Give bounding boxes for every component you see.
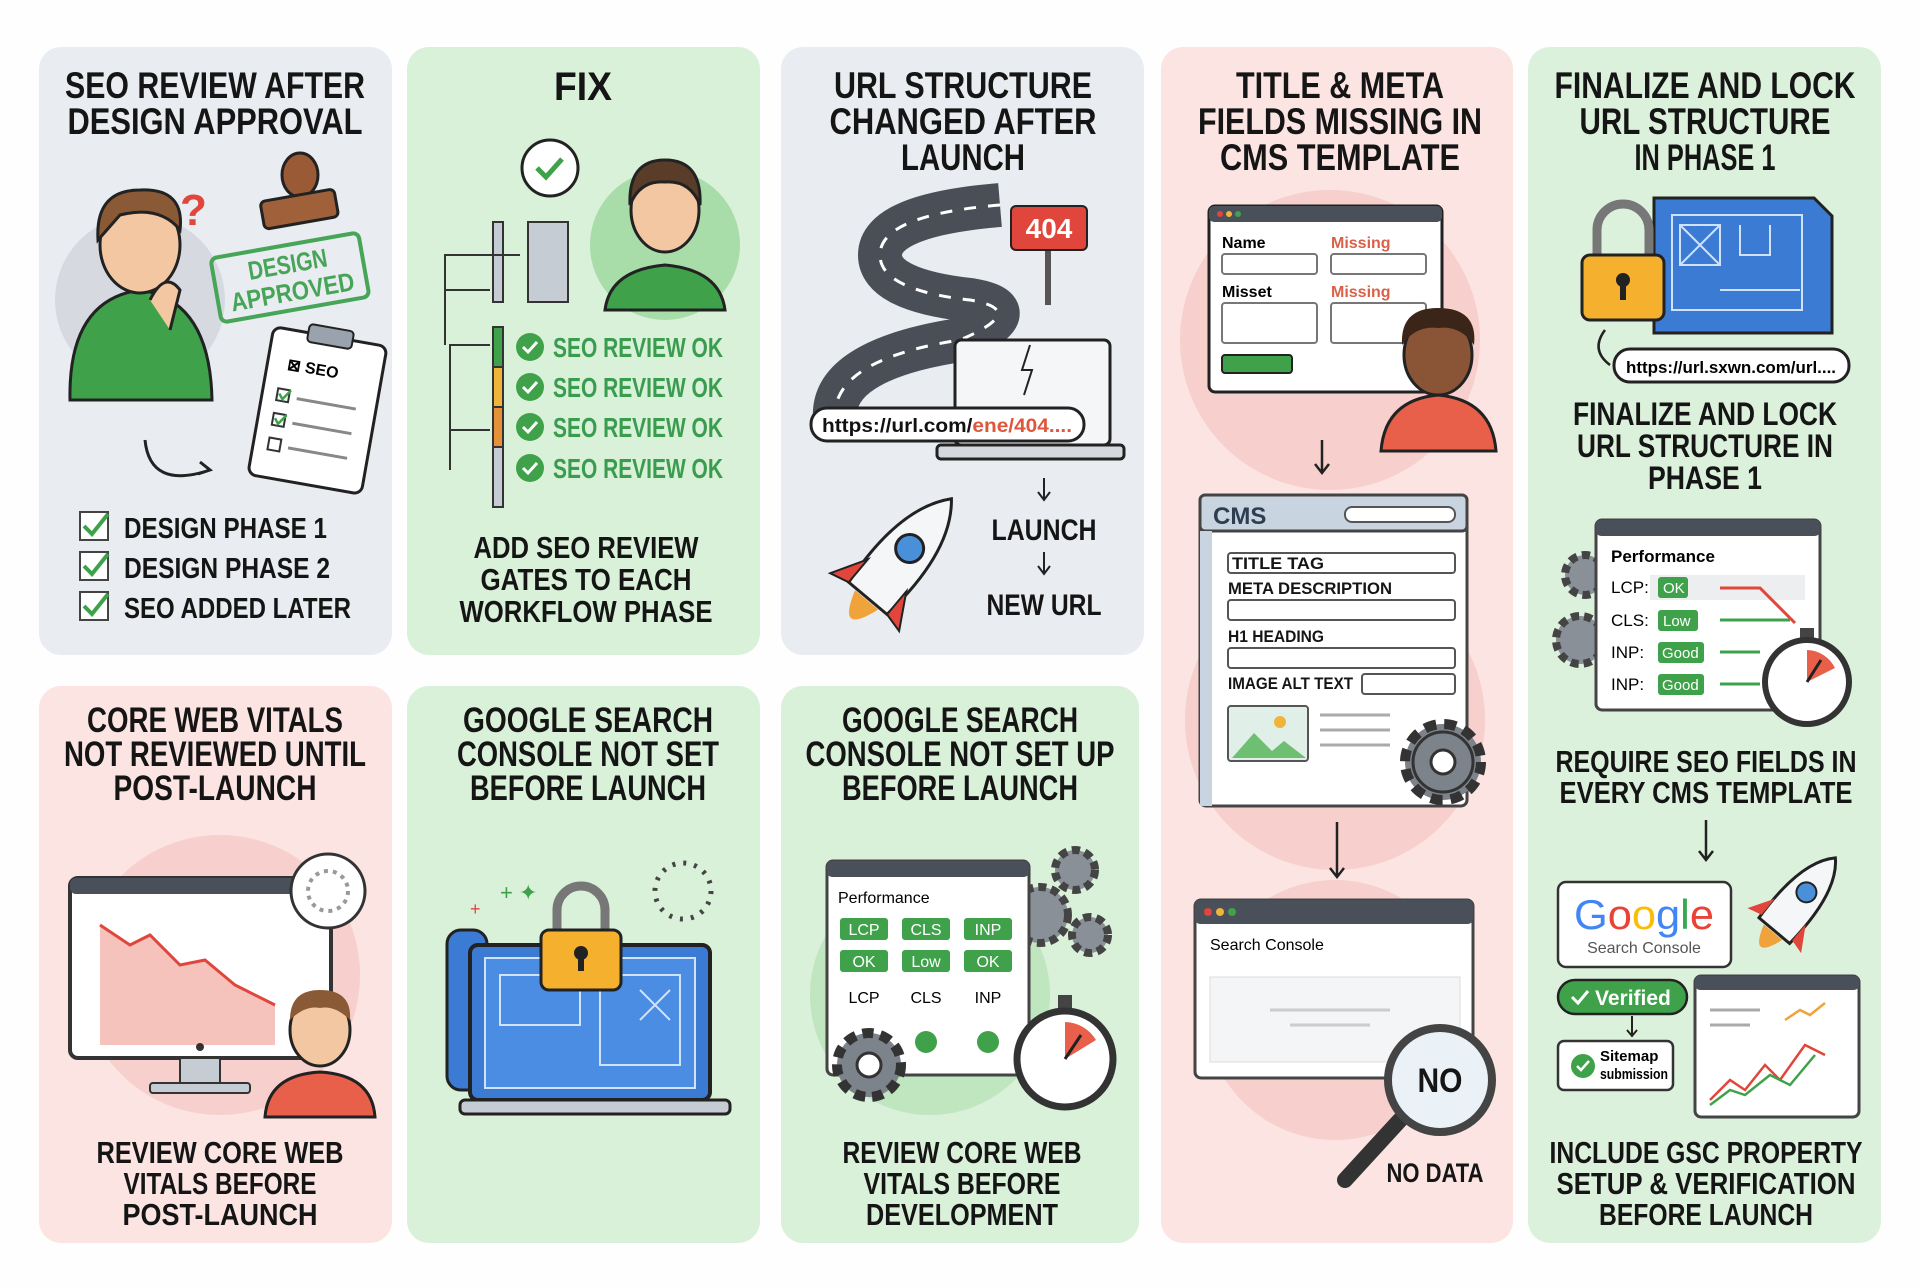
sitemap box: submission	[1600, 1066, 1668, 1083]
performance window: CLS	[910, 990, 942, 1007]
arrow	[1315, 440, 1329, 473]
heading: GOOGLE SEARCH	[463, 701, 713, 740]
heading	[1554, 65, 1856, 178]
url pill: https://url.sxwn.com/url....	[1626, 358, 1836, 377]
search console window	[1195, 900, 1473, 1078]
performance window	[1596, 520, 1820, 710]
form window: Misset	[1222, 284, 1272, 301]
illustration: road	[835, 205, 1000, 420]
url pill: https://url.com/ ene/404....	[822, 416, 1072, 437]
text: fix description: GATES TO EACH	[480, 562, 692, 597]
performance window: OK	[852, 954, 876, 971]
list: seo review ok: SEO REVIEW OK	[553, 332, 723, 363]
icon: blueprint laptop	[447, 930, 730, 1114]
chart window	[1695, 976, 1859, 1117]
performance window: LCP	[848, 990, 880, 1007]
heading: NOT REVIEWED UNTIL	[64, 735, 366, 774]
arrow	[1699, 820, 1713, 860]
performance window: CLS:	[1611, 611, 1649, 630]
heading: TITLE & META	[1236, 65, 1444, 106]
subheading: PHASE 1	[1648, 460, 1762, 496]
illustration: sad person	[1381, 308, 1496, 451]
cms window	[1200, 495, 1467, 806]
text: require seo fields	[1556, 744, 1856, 810]
panel: url structure changed	[781, 47, 1144, 655]
text: review cwv before development: DEVELOPMENT	[866, 1197, 1058, 1232]
performance window: OK	[1663, 580, 1685, 597]
icon: padlock	[541, 886, 621, 990]
icon: gears	[1012, 850, 1108, 953]
heading: POST-LAUNCH	[114, 769, 316, 808]
performance window: OK	[976, 954, 1000, 971]
performance window: INP	[975, 922, 1001, 939]
heading: IN PHASE 1	[1634, 137, 1776, 178]
performance window: Low	[911, 954, 941, 971]
text: review cwv before development	[842, 1135, 1082, 1232]
performance window: Low	[1663, 613, 1691, 630]
icon: rocket	[1734, 835, 1862, 969]
performance window: Good	[1662, 677, 1699, 694]
list: seo review ok	[516, 332, 723, 484]
icon: spinner	[470, 863, 711, 919]
text: fix description	[460, 530, 712, 629]
icon: 404 sign: 404	[1026, 213, 1073, 244]
performance window: INP	[975, 990, 1001, 1007]
illustration: sad person	[265, 990, 375, 1117]
text: fix description: ADD SEO REVIEW	[474, 530, 699, 565]
icon: seo clipboard: ⊠ SEO	[286, 357, 340, 382]
illustration: happy person	[522, 140, 740, 320]
performance window: Performance	[838, 890, 930, 907]
cms window: CMS	[1213, 503, 1266, 530]
cms window: TITLE TAG	[1232, 554, 1324, 573]
form window: Name	[1222, 235, 1266, 252]
panel: google search console not set	[407, 686, 760, 1243]
icon: 404 sign	[1011, 206, 1087, 305]
subheading	[1573, 396, 1837, 496]
checklist	[80, 512, 351, 625]
text: review cwv: POST-LAUNCH	[122, 1197, 318, 1232]
subheading: FINALIZE AND LOCK	[1573, 396, 1837, 432]
performance window: LCP:	[1611, 578, 1649, 597]
heading: GOOGLE SEARCH	[842, 701, 1078, 740]
list: seo review ok: SEO REVIEW OK	[553, 372, 723, 403]
heading: SEO REVIEW AFTER	[65, 65, 365, 106]
performance window: LCP	[848, 922, 880, 939]
illustration: thinking person	[55, 186, 225, 400]
icon: loading spinner	[291, 854, 365, 928]
heading: FIELDS MISSING IN	[1198, 101, 1482, 142]
url pill	[1599, 330, 1849, 382]
flow: launch new url	[986, 478, 1102, 622]
icon: stopwatch	[1017, 995, 1113, 1107]
heading: CORE WEB VITALS	[87, 701, 343, 740]
text: review cwv: VITALS BEFORE	[124, 1166, 316, 1201]
checklist: SEO ADDED LATER	[124, 593, 351, 625]
cms window: META DESCRIPTION	[1228, 579, 1392, 598]
text: review cwv before development: VITALS BEFORE	[864, 1166, 1060, 1201]
google search console box: Search Console	[1587, 940, 1701, 957]
heading: BEFORE LAUNCH	[842, 769, 1078, 808]
form window	[1209, 206, 1442, 392]
heading	[830, 65, 1096, 178]
form window: Missing	[1331, 284, 1391, 301]
icon: laptop	[937, 340, 1124, 459]
heading: CONSOLE NOT SET	[457, 735, 719, 774]
performance window: INP:	[1611, 643, 1644, 662]
icon: monitor chart	[70, 878, 331, 1093]
list: seo review ok: SEO REVIEW OK	[553, 412, 723, 443]
subheading: URL STRUCTURE IN	[1577, 428, 1833, 464]
checklist: DESIGN PHASE 2	[124, 553, 330, 585]
heading: URL STRUCTURE	[1580, 101, 1830, 142]
illustration: thinking person: ?	[180, 186, 207, 235]
icon: rocket	[817, 470, 986, 647]
search console window: Search Console	[1210, 937, 1324, 954]
list: seo review ok: SEO REVIEW OK	[553, 453, 723, 484]
heading: FIX	[554, 65, 612, 109]
flow: launch new url: NEW URL	[986, 589, 1102, 622]
text: include gsc: BEFORE LAUNCH	[1599, 1197, 1813, 1232]
icon: blueprint and lock	[1582, 198, 1832, 333]
icon: magnifier no	[1345, 1028, 1492, 1180]
icon: spinner: +	[470, 899, 481, 919]
icon: seo clipboard	[248, 318, 389, 494]
sitemap box: Sitemap	[1600, 1048, 1658, 1065]
performance window: CLS	[910, 922, 942, 939]
text: review cwv: REVIEW CORE WEB	[96, 1135, 344, 1170]
heading: CMS TEMPLATE	[1220, 137, 1460, 178]
panel: finalize and lock url	[1528, 47, 1881, 1243]
icon: gears	[1556, 555, 1605, 664]
heading: FINALIZE AND LOCK	[1554, 65, 1856, 106]
panel: title & meta missing	[1161, 47, 1513, 1243]
arrow	[1330, 822, 1344, 877]
arrow	[145, 440, 210, 476]
performance window: Performance	[1611, 547, 1715, 566]
text: include gsc: SETUP & VERIFICATION	[1556, 1166, 1856, 1201]
flow: launch new url: LAUNCH	[992, 514, 1096, 547]
heading: CHANGED AFTER	[830, 101, 1096, 142]
heading: BEFORE LAUNCH	[470, 769, 706, 808]
heading	[65, 65, 365, 142]
text: fix description: WORKFLOW PHASE	[460, 594, 712, 629]
text: no data: NO DATA	[1386, 1158, 1484, 1188]
google search console box: Google	[1574, 891, 1714, 938]
performance window: INP:	[1611, 675, 1644, 694]
checklist: DESIGN PHASE 1	[124, 513, 327, 545]
icon: gear	[1405, 724, 1481, 800]
text: review cwv	[96, 1135, 344, 1232]
panel: core web vitals not reviewed	[39, 686, 392, 1243]
google search console box	[1558, 882, 1731, 967]
text: review cwv before development: REVIEW CORE WEB	[842, 1135, 1082, 1170]
text: include gsc	[1550, 1135, 1863, 1232]
verified pill: Verified	[1595, 987, 1671, 1010]
text: require seo fields: REQUIRE SEO FIELDS IN	[1556, 744, 1856, 779]
heading: URL STRUCTURE	[834, 65, 1092, 106]
heading: CONSOLE NOT SET UP	[806, 735, 1114, 774]
heading	[1198, 65, 1482, 178]
form window: Missing	[1331, 235, 1391, 252]
icon: gear	[837, 1033, 901, 1097]
icon: magnifier no: NO	[1418, 1062, 1462, 1100]
icon: gates	[445, 222, 568, 507]
verified pill	[1558, 980, 1687, 1036]
cms window: IMAGE ALT TEXT	[1228, 674, 1354, 693]
icon: spinner: + ✦	[500, 880, 537, 905]
icon: design approved stamp: DESIGN	[246, 242, 330, 286]
panel: fix	[407, 47, 760, 655]
icon: design approved stamp	[210, 153, 369, 323]
heading	[806, 701, 1114, 808]
panel: seo review after design approval	[39, 47, 392, 655]
heading: DESIGN APPROVAL	[68, 101, 362, 142]
performance window: Good	[1662, 645, 1699, 662]
cms window: H1 HEADING	[1228, 627, 1324, 646]
icon: design approved stamp: APPROVED	[228, 266, 357, 317]
sitemap box	[1558, 1041, 1673, 1090]
url pill	[811, 408, 1084, 441]
heading	[64, 701, 366, 808]
performance window	[827, 861, 1029, 1075]
heading	[457, 701, 719, 808]
icon: stopwatch	[1765, 628, 1849, 724]
heading: LAUNCH	[901, 137, 1025, 178]
text: require seo fields: EVERY CMS TEMPLATE	[1560, 775, 1852, 810]
panel: google search console not set up	[781, 686, 1139, 1243]
